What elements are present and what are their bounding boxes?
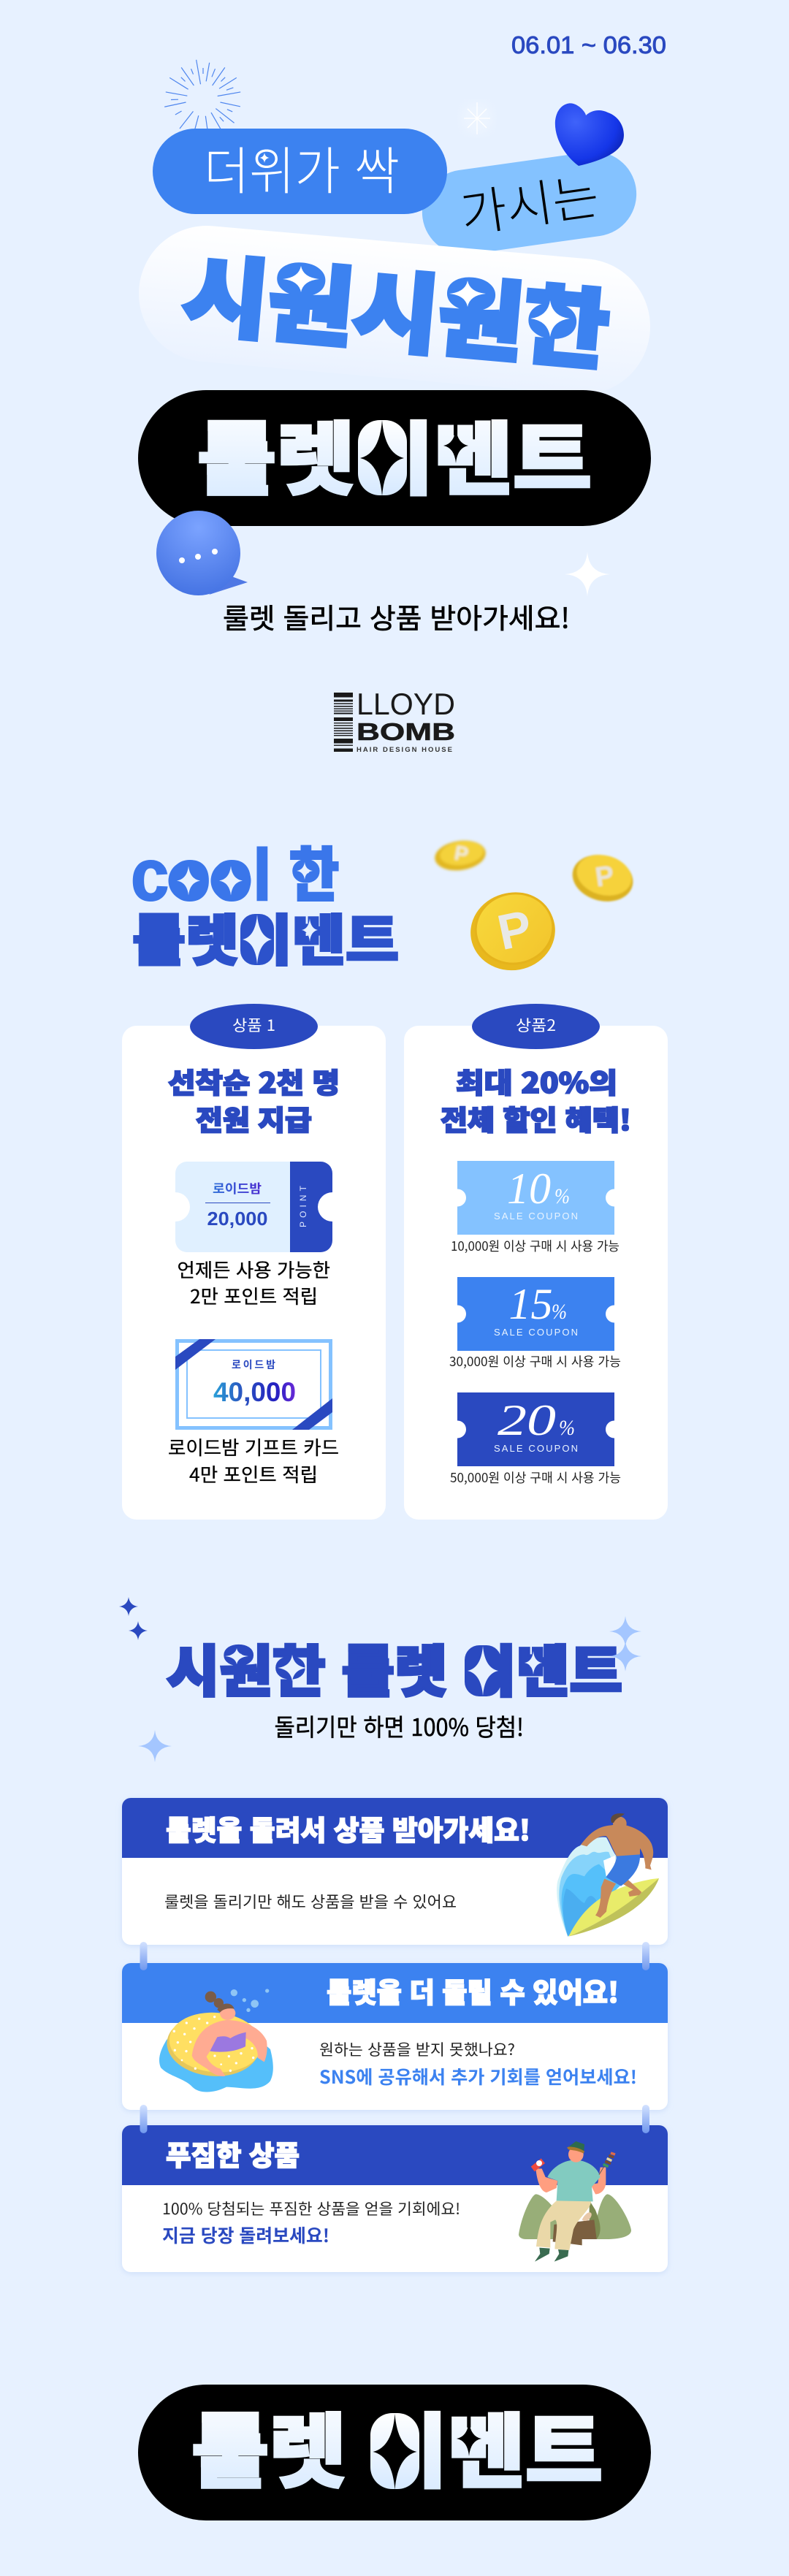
panel: prize 1 [122, 1004, 386, 1520]
coupon 10% [457, 1161, 614, 1235]
white tilted pill with 시원시원한 [133, 220, 656, 400]
light blue pill with 가시는 [416, 146, 642, 260]
prize 2 heading: 최대 20%의 [456, 1061, 617, 1101]
card 1 text: 룰렛을 돌리기만 해도 상품을 받을 수 있어요 [164, 1890, 457, 1913]
coupon 15% [457, 1277, 614, 1351]
heading: cool 한 룰렛이벤트 [131, 828, 399, 976]
coupon 20%: 20 [498, 1396, 556, 1444]
illustration: man on stump [519, 2141, 631, 2262]
badge: 상품 1: 상품 1 [232, 1014, 275, 1036]
point ticket 20,000: 20,000 [207, 1208, 267, 1230]
card 2 text: 원하는 상품을 받지 못했나요? [319, 2038, 515, 2060]
coupon 20% [457, 1392, 614, 1466]
card 2 title: 룰렛을 더 돌릴 수 있어요! [327, 1970, 619, 2011]
logo: Lloyd Bomb: LLOYD [357, 687, 455, 721]
point ticket caption: 언제든 사용 가능한 [177, 1256, 330, 1283]
gift card 40,000 [175, 1339, 332, 1430]
card 3 text: 지금 당장 돌려보세요! [162, 2222, 329, 2248]
gift card caption: 로이드밤 기프트 카드 [168, 1433, 339, 1460]
bottom black pill with 룰렛 이벤트 [138, 2385, 651, 2520]
gift card caption [168, 1433, 339, 1487]
icon: dark sparkles [119, 1597, 148, 1640]
light blue pill with 가시는: 가시는 [455, 156, 603, 247]
icon: firework burst [164, 60, 240, 137]
logo: Lloyd Bomb [334, 687, 455, 754]
bottom black pill with 룰렛 이벤트: 룰렛 이벤트 [191, 2387, 603, 2504]
card 3 text: 100% 당첨되는 푸짐한 상품을 얻을 기회에요! [162, 2198, 460, 2219]
logo: Lloyd Bomb: BOMB [357, 718, 455, 745]
icon: white snowflake [461, 102, 493, 134]
point ticket caption [177, 1256, 330, 1309]
card 3: abundant prizes [122, 2125, 668, 2272]
black pill with 룰렛이벤트: 룰렛이벤트 [197, 397, 592, 511]
point ticket 20,000: 로이드밤 [213, 1178, 262, 1197]
icon: blurred small coin: P [453, 842, 470, 866]
gift card 40,000: 로 이 드 밤 [232, 1357, 275, 1372]
heading: 시원한 룰렛 이벤트: 시원한 룰렛 이벤트 [167, 1627, 622, 1707]
coupon 15%: SALE COUPON [494, 1327, 578, 1338]
badge: 상품2 [472, 1004, 600, 1049]
badge: 상품2: 상품2 [516, 1014, 556, 1036]
blue pill with 더위가 싹 [153, 129, 447, 214]
badge: 상품 1 [190, 1004, 318, 1049]
icon: blurred small coin [433, 837, 487, 874]
icon: blue 3D heart [555, 103, 624, 166]
connectors between cards [140, 1942, 649, 2133]
card 1 title: 룰렛을 돌려서 상품 받아가세요! [166, 1808, 530, 1848]
subheading: 돌리기만 하면 100% 당첨! [275, 1708, 524, 1743]
icon: light sparkle left [138, 1730, 172, 1762]
prize 2 heading: 전체 할인 혜택! [441, 1098, 631, 1138]
card 1: spin for prizes [122, 1798, 668, 1945]
prize 1 heading: 선착순 2천 명 [168, 1061, 340, 1101]
prize 1 heading [168, 1061, 340, 1138]
icon: large gold coin [465, 886, 561, 977]
coupon 15% condition: 30,000원 이상 구매 시 사용 가능 [449, 1352, 621, 1371]
gift card 40,000: 40,000 [213, 1377, 296, 1407]
card 3 text [162, 2198, 460, 2248]
heading: cool 한 룰렛이벤트: cool [131, 834, 272, 916]
point ticket 20,000: POINT [298, 1185, 308, 1227]
illustration: swimmer on tube [159, 1989, 273, 2092]
icon: 3D speech bubble [156, 511, 248, 595]
blue pill with 더위가 싹: 더위가 싹 [204, 131, 400, 205]
icon: blurred medium coin: P [593, 860, 616, 893]
heading: cool 한 룰렛이벤트: 룰렛이벤트 [132, 896, 399, 976]
icon: white sparkle [565, 552, 610, 597]
point ticket 20,000 [175, 1162, 332, 1252]
date range: 06.01 ~ 06.30 [511, 31, 666, 58]
coupon 20%: SALE COUPON [494, 1443, 578, 1454]
icon: light sparkles right [609, 1616, 641, 1672]
coupon 15%: 15 [508, 1280, 552, 1328]
black pill with 룰렛이벤트 [138, 390, 651, 526]
card 3 title: 푸짐한 상품 [166, 2133, 300, 2173]
coupon 15%: % [552, 1300, 567, 1324]
coupon 10%: SALE COUPON [494, 1211, 578, 1222]
icon: blurred medium coin [567, 848, 639, 908]
gift card caption: 4만 포인트 적립 [189, 1460, 318, 1487]
coupon 10%: % [554, 1184, 570, 1208]
white tilted pill with 시원시원한: 시원시원한 [178, 225, 614, 386]
panel: prize 2 [404, 1004, 668, 1520]
coupon 20%: % [559, 1416, 575, 1440]
prize 2 heading [441, 1061, 631, 1138]
coupon 10% condition: 10,000원 이상 구매 시 사용 가능 [451, 1237, 620, 1255]
heading: cool 한 룰렛이벤트: 한 [289, 828, 339, 913]
card 2 text [319, 2038, 637, 2089]
coupon 10%: 10 [507, 1165, 551, 1213]
icon: large gold coin: P [493, 899, 537, 961]
illustration: surfer [557, 1813, 659, 1937]
logo: Lloyd Bomb: HAIR DESIGN HOUSE [357, 746, 452, 754]
prize 1 heading: 전원 지급 [196, 1098, 312, 1138]
card 2: more spins [122, 1963, 668, 2110]
point ticket caption: 2만 포인트 적립 [190, 1282, 318, 1309]
card 2 text: SNS에 공유해서 추가 기회를 얻어보세요! [319, 2063, 637, 2089]
subtitle: 룰렛 돌리고 상품 받아가세요! [223, 596, 570, 636]
coupon 20% condition: 50,000원 이상 구매 시 사용 가능 [450, 1468, 621, 1487]
